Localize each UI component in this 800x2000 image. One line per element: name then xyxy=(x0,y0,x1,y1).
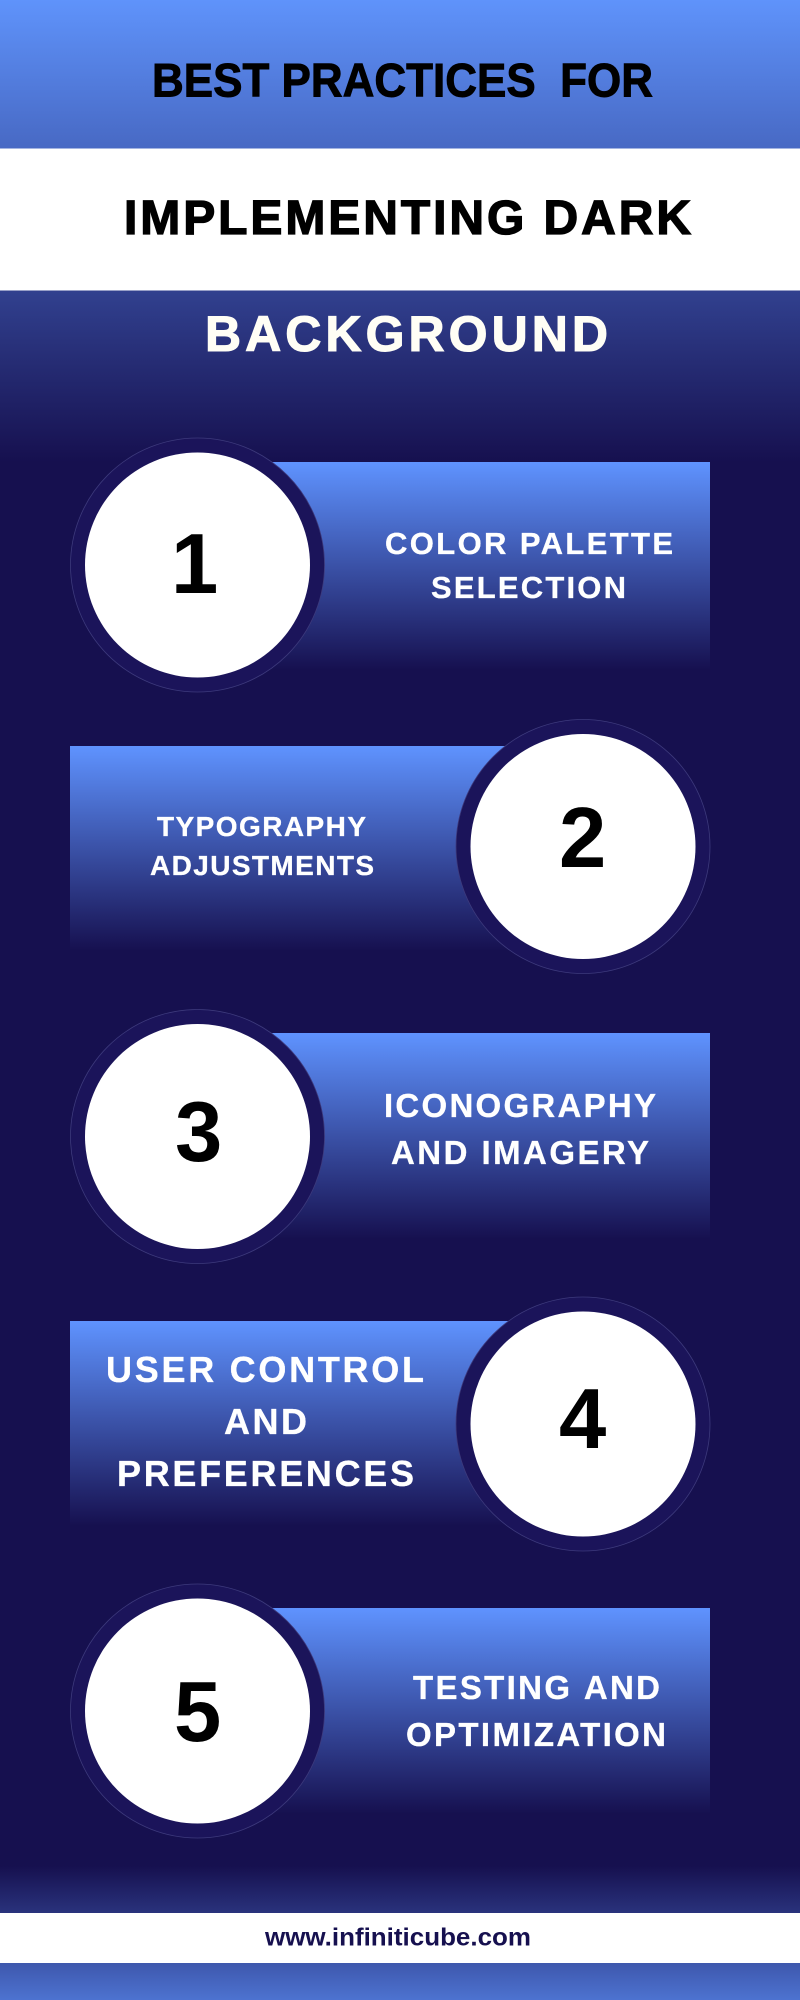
panel: step 1 color palette selection xyxy=(70,438,710,692)
panel: step 2 typography adjustments xyxy=(70,720,710,974)
badge 4: 4 xyxy=(559,1372,606,1467)
banner 5 xyxy=(197,1608,710,1814)
label 1 xyxy=(385,526,673,605)
label 4: AND xyxy=(224,1401,307,1442)
label 2 xyxy=(150,811,374,881)
title xyxy=(124,54,691,362)
title line 2: IMPLEMENTING DARK xyxy=(124,192,691,245)
title line 3: BACKGROUND xyxy=(205,306,608,362)
label 2: ADJUSTMENTS xyxy=(150,850,374,881)
label 5: TESTING AND xyxy=(413,1669,660,1706)
banner 4 xyxy=(70,1321,583,1526)
label 3: ICONOGRAPHY xyxy=(384,1087,656,1124)
panel: step 3 iconography and imagery xyxy=(70,1010,710,1264)
badge 5 xyxy=(70,1584,324,1838)
badge 2: 2 xyxy=(559,791,606,886)
badge 2 xyxy=(456,720,710,974)
badge 5: 5 xyxy=(174,1665,221,1760)
title band: white stripe xyxy=(0,148,800,290)
footer band xyxy=(0,1913,800,1963)
badge 4 xyxy=(456,1297,710,1551)
panel: step 5 testing and optimization xyxy=(70,1584,710,1838)
badge 3 xyxy=(70,1010,324,1264)
banner 3 xyxy=(197,1033,710,1239)
footer url: www.infiniticube.com xyxy=(264,1924,531,1952)
banner 1 xyxy=(197,462,710,670)
label 1: COLOR PALETTE xyxy=(385,526,673,561)
banner 2 xyxy=(70,746,583,951)
title line 1: BEST PRACTICES FOR xyxy=(152,54,653,106)
label 5: OPTIMIZATION xyxy=(406,1716,666,1753)
label 2: TYPOGRAPHY xyxy=(157,811,366,842)
label 1: SELECTION xyxy=(431,570,626,605)
label 4: PREFERENCES xyxy=(117,1453,414,1494)
label 3: AND IMAGERY xyxy=(391,1134,649,1171)
badge 1 xyxy=(70,438,324,692)
label 4 xyxy=(106,1349,424,1494)
badge 3: 3 xyxy=(175,1085,222,1180)
panel: step 4 user control and preferences xyxy=(70,1297,710,1551)
badge 1: 1 xyxy=(171,517,218,612)
label 4: USER CONTROL xyxy=(106,1349,424,1390)
label 3 xyxy=(384,1087,656,1171)
label 5 xyxy=(406,1669,666,1753)
